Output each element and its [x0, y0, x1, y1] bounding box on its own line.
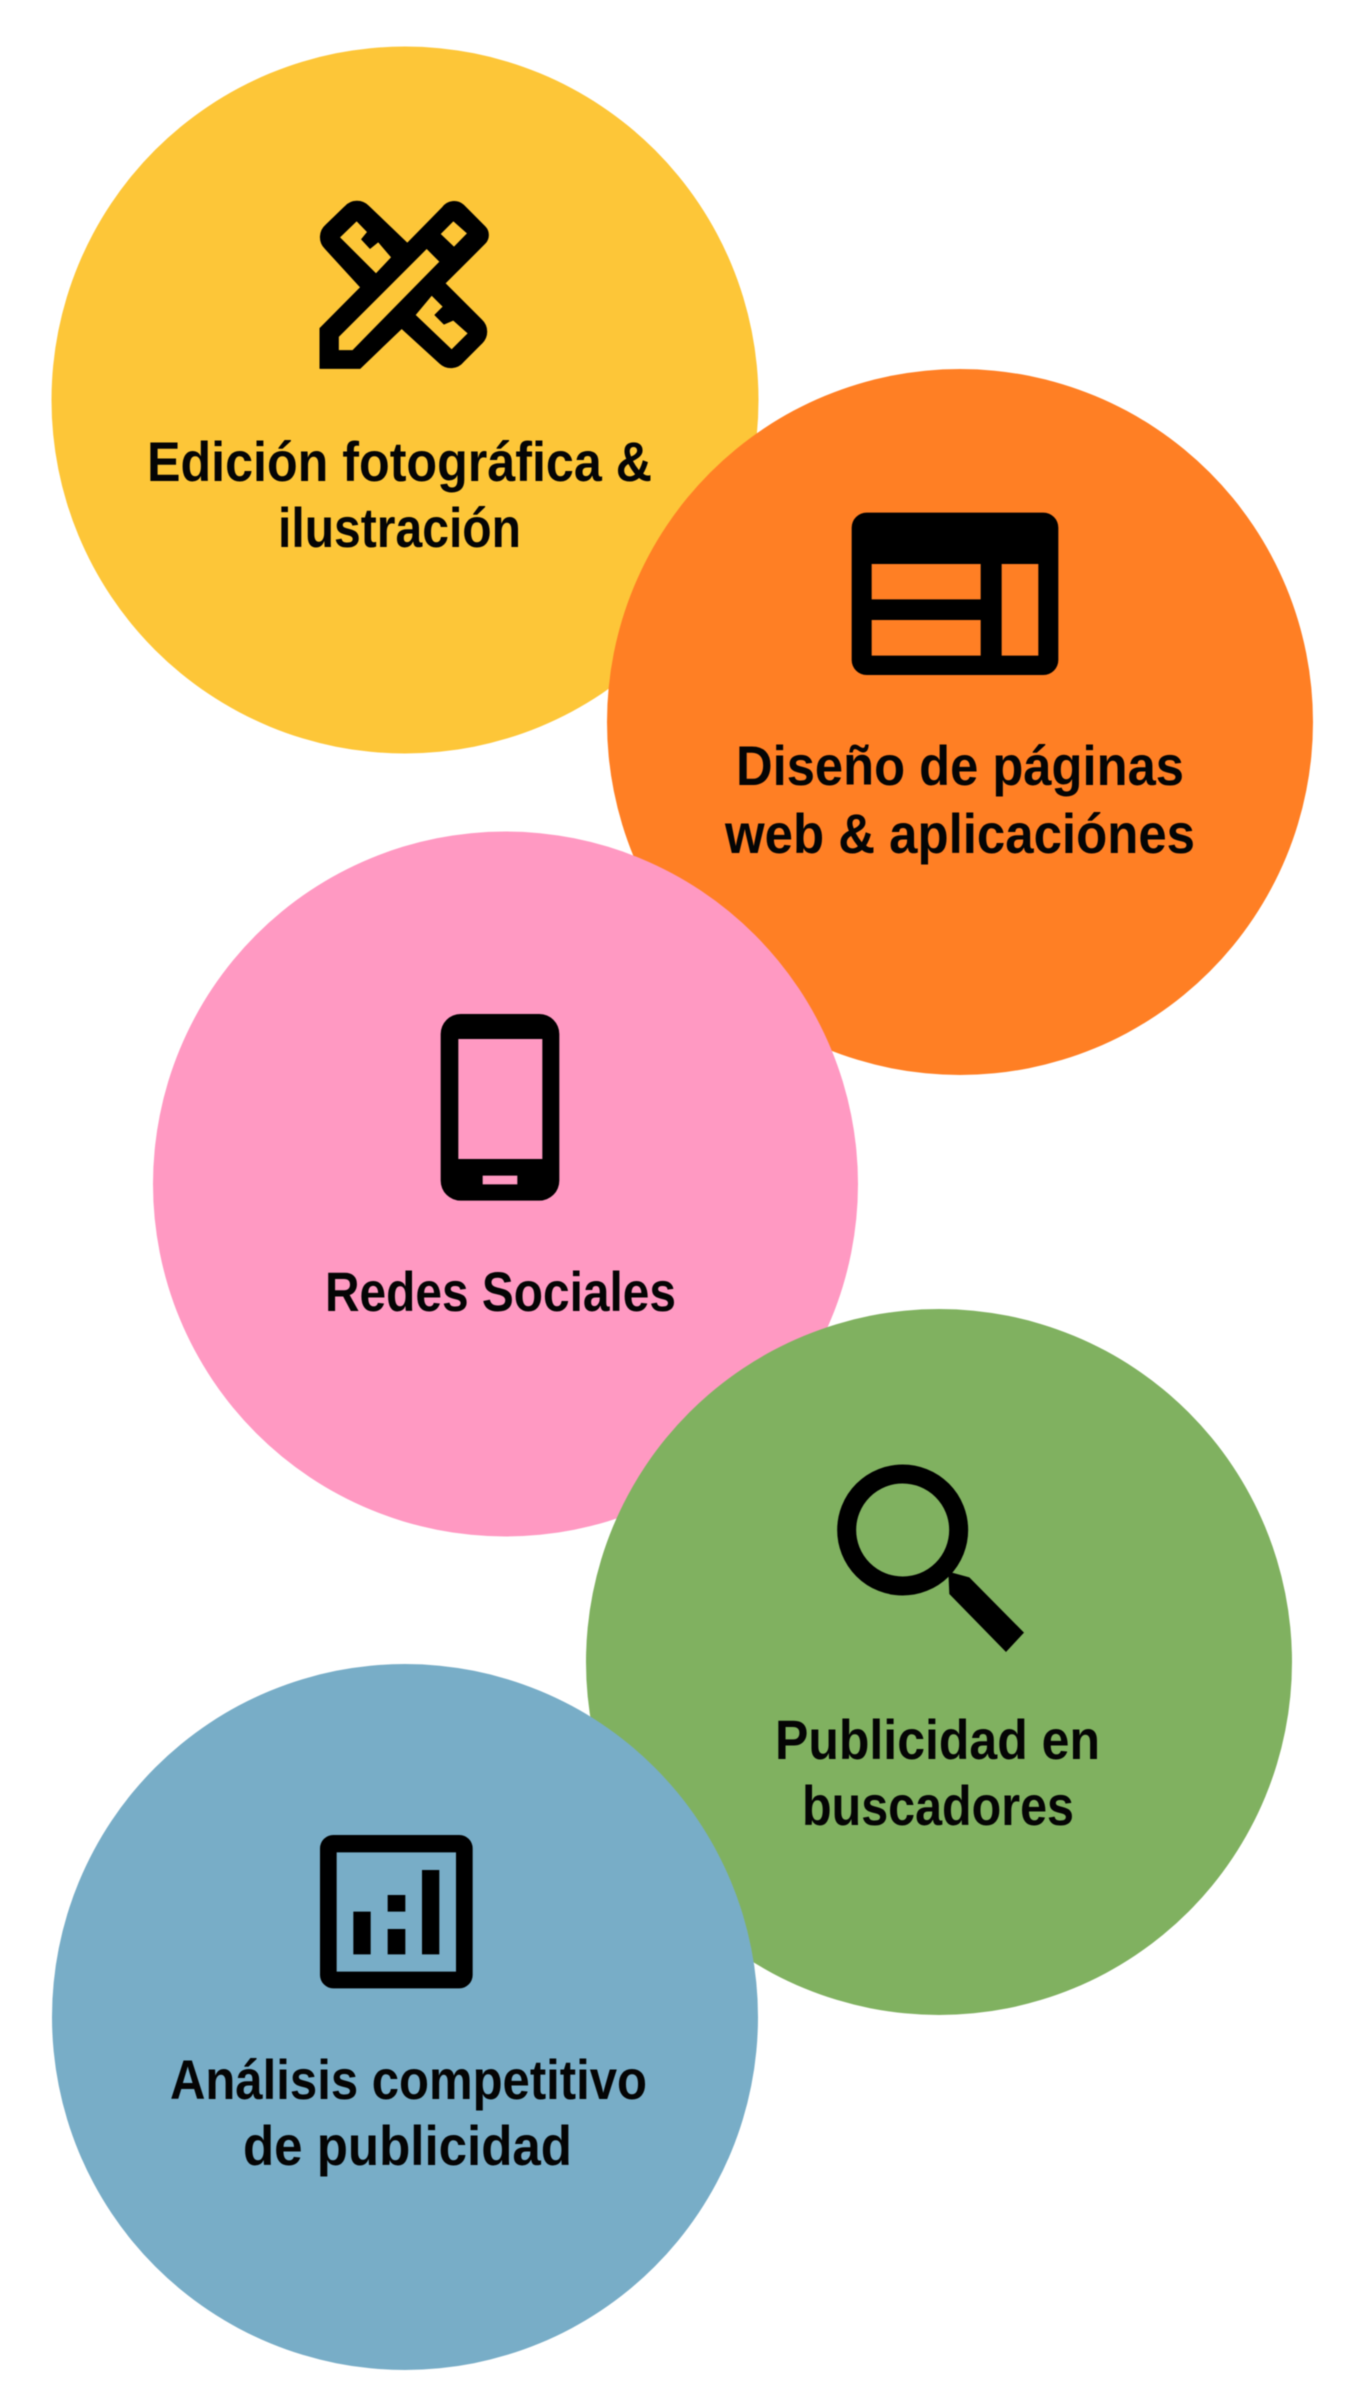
icon: web page layout [852, 513, 1058, 675]
circle: pink [153, 832, 858, 1536]
heading: Publicidad en buscadores: buscadores [802, 1774, 1074, 1837]
panel: Diseño de páginas web & aplicaciónes [607, 369, 1313, 1075]
panel: Edición fotográfica & ilustración [52, 46, 758, 754]
panel: Análisis competitivo de publicidad [52, 1664, 758, 2370]
heading: Redes Sociales: Redes Sociales [325, 1260, 676, 1323]
panel: Redes Sociales [153, 832, 858, 1536]
circle: blue [52, 1664, 758, 2370]
icon: bar chart [320, 1835, 473, 1988]
heading: Diseño de páginas web & aplicaciónes: web & aplicaciónes [724, 802, 1195, 865]
heading: Edición fotográfica & ilustración [147, 430, 652, 559]
icon: smartphone [441, 1014, 559, 1201]
icon: pencil and ruler [320, 201, 488, 368]
heading: Análisis competitivo de publicidad [170, 2048, 647, 2177]
circle: green [586, 1309, 1292, 2015]
heading: Publicidad en buscadores: Publicidad en [775, 1708, 1100, 1771]
heading: Análisis competitivo de publicidad: Análisis competitivo [170, 2048, 647, 2111]
panel: Publicidad en buscadores [586, 1309, 1292, 2015]
heading: Edición fotográfica & ilustración: Edición fotográfica & [147, 430, 652, 493]
icon: magnifying glass [847, 1474, 1024, 1652]
circle: yellow [52, 46, 758, 754]
heading: Análisis competitivo de publicidad: de publicidad [243, 2114, 572, 2177]
heading: Publicidad en buscadores [775, 1708, 1100, 1837]
heading: Diseño de páginas web & aplicaciónes: Diseño de páginas [736, 734, 1184, 797]
heading: Diseño de páginas web & aplicaciónes [724, 734, 1195, 865]
circle: orange [607, 369, 1313, 1075]
heading: Edición fotográfica & ilustración: ilustración [278, 496, 521, 559]
